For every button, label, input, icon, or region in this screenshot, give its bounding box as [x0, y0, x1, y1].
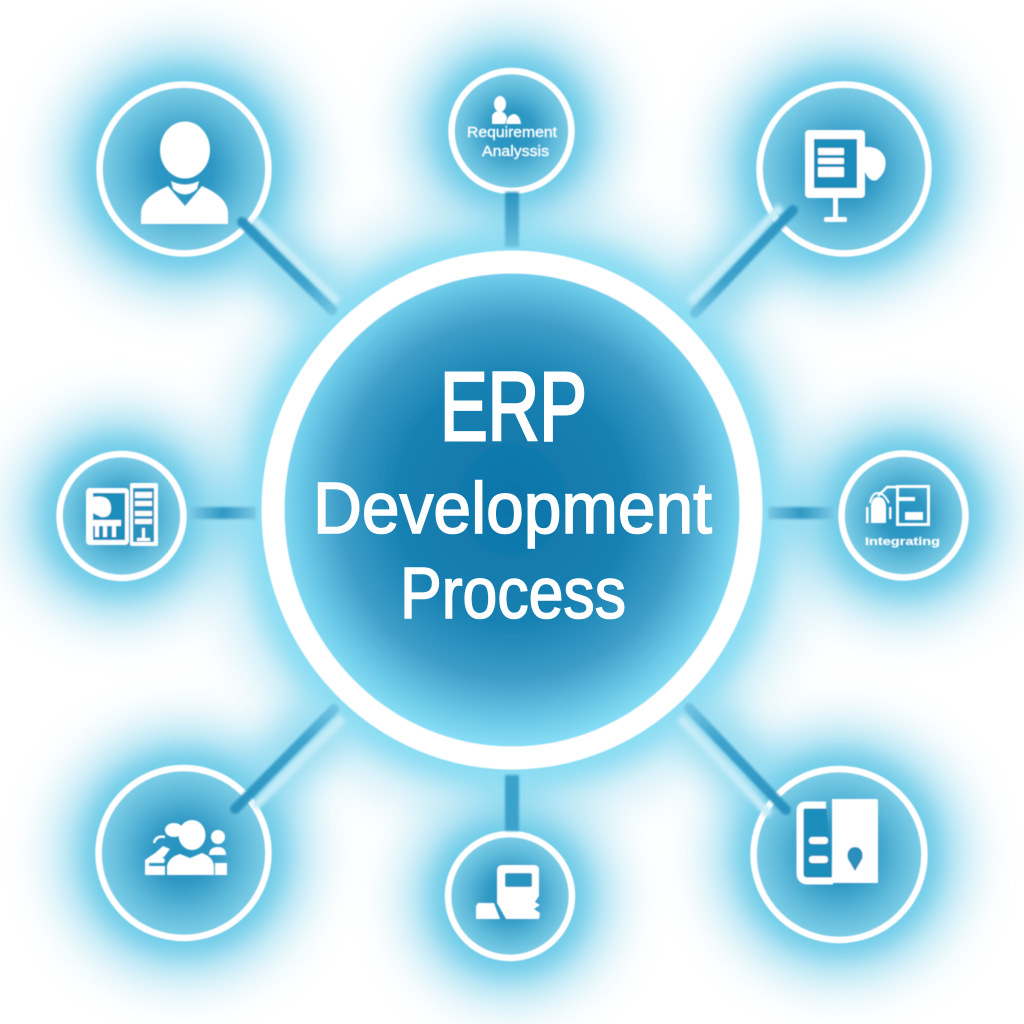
icon: two people	[492, 96, 521, 124]
connector: bottom	[505, 775, 519, 831]
panel: team node	[98, 768, 268, 938]
panel: integrating node	[842, 454, 966, 578]
title: Development: Development	[313, 469, 712, 549]
title: ERP: ERP	[440, 352, 587, 461]
icon: team	[145, 820, 227, 875]
panel: terminal node	[448, 834, 572, 958]
panel: presentation node	[760, 84, 928, 254]
connector: left	[190, 507, 256, 519]
label: integrating: Integrating	[865, 536, 940, 548]
connector: top right	[690, 207, 793, 313]
icon: display board	[805, 130, 886, 222]
panel: requirement analysis node	[452, 71, 572, 191]
connector: right	[768, 507, 834, 519]
connector: top left	[242, 220, 338, 310]
connector: bottom left	[235, 709, 343, 809]
label: analysis: Analyssis	[482, 143, 549, 160]
connector: bottom right	[680, 708, 786, 815]
connector: top	[505, 192, 519, 247]
label: requirement: Requirement	[467, 124, 558, 141]
icon: card and server	[86, 483, 158, 546]
icon: terminal device	[476, 865, 540, 919]
hub disc and ring	[273, 262, 751, 758]
panel: storage node	[754, 769, 924, 940]
panel: user node	[100, 84, 268, 254]
panel: central hub	[273, 262, 751, 758]
title: Process: Process	[400, 554, 626, 634]
icon: person	[141, 122, 228, 224]
icon: binder	[800, 799, 878, 883]
icon: lock and window	[866, 485, 930, 526]
panel: documents node	[60, 454, 184, 578]
